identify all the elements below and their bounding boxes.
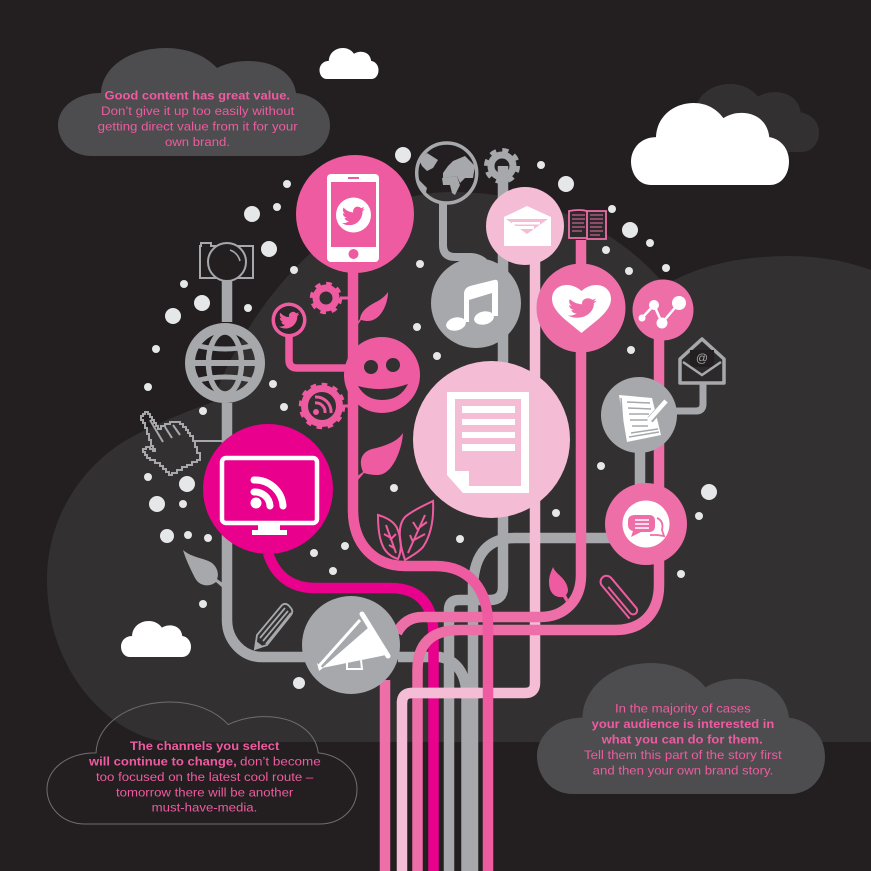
icon: music circle [431,258,521,348]
branch: pink stem under megaphone [380,680,390,871]
branch: pink gear link [340,296,350,300]
small white cloud top [320,48,378,79]
callout: good content cloud: Good content has great value. [104,88,290,102]
callout: audience cloud: what you can do for them. [601,733,763,747]
branch: light pink mail line [402,226,535,871]
icon: paper clip [598,573,639,619]
callout: audience cloud [537,663,825,794]
icon: heart circle [536,264,626,352]
callout: good content cloud: own brand. [165,135,230,149]
branch: small twitter link [289,335,350,368]
leaf: grey [183,550,224,589]
icon: chat circle [605,483,687,565]
callout: audience cloud: Tell them this part of the story first [584,748,782,762]
icon: document circle [413,361,570,518]
icon: small twitter circle [272,302,306,338]
callout: good content cloud: getting direct value from it for your [98,119,298,133]
tree branches [196,166,703,871]
icon: pink gear [312,284,340,312]
large white cloud [631,103,789,185]
icon: outline plant [378,501,433,560]
callout: channels outlined cloud: tomorrow there will be another [116,785,293,799]
callout: channels outlined cloud: too focused on the latest cool route – [96,770,314,784]
branch: magenta monitor line [268,553,434,871]
callout: channels outlined cloud: must-have-media. [152,801,257,815]
icon: book [569,210,606,239]
callout: audience cloud: and then your own brand story. [593,763,773,777]
branch: grey centre trunk [449,166,503,871]
callout: channels outlined cloud: The channels you select [130,739,279,753]
branch: notepad to chat [635,450,645,490]
leaf: pink upper [356,292,388,326]
icon: globe [190,328,260,398]
icon: pencil [255,604,292,649]
callout: audience cloud: your audience is interested in [592,717,774,731]
leaf: small pink [549,567,569,602]
decorative dots [144,147,717,689]
icon: grey gear [486,150,518,182]
small white cloud lower left [121,621,191,657]
icon: smiley face [344,337,420,413]
icon: monitor with rss [203,424,333,554]
branch: grey megaphone link [398,657,466,871]
branch: notepad to email [672,383,703,411]
branch: pink outer line to chart [418,310,659,871]
icon: pixel cursor hand [141,412,200,475]
callout: good content cloud: Don’t give it up too easily without [101,104,295,118]
icon: notepad circle [601,377,677,453]
icon: email at sign: @ [696,351,708,365]
callout: channels outlined cloud: don’t become [240,754,321,768]
callout: channels outlined cloud: will continue to change, [88,754,237,768]
leaf: pink lower [356,433,403,480]
branch: thin cursor link [196,440,224,442]
branch: light pink crossing [402,693,480,703]
background hills [47,192,871,742]
branch: grey chat link [473,538,610,871]
icon: earth [417,143,477,203]
icon: mail circle [486,187,564,265]
branch: pink megaphone to heart [397,240,581,633]
branch: earth to music [443,203,484,262]
icon: megaphone circle [302,596,400,694]
callout: good content cloud [58,48,330,156]
icon: email at sign [680,339,724,383]
icon: phone circle [296,155,414,273]
callout: audience cloud: In the majority of cases [615,702,751,716]
branch: pink phone trunk [353,214,488,871]
icon: rss gear [300,384,344,428]
callout: channels outlined cloud [47,702,357,824]
icon: line chart circle [632,280,694,340]
branch: rss gear link [343,404,350,408]
branch: left grey trunk [227,280,310,657]
dark cloud behind white cloud [672,84,819,152]
icon: camera [200,243,253,281]
